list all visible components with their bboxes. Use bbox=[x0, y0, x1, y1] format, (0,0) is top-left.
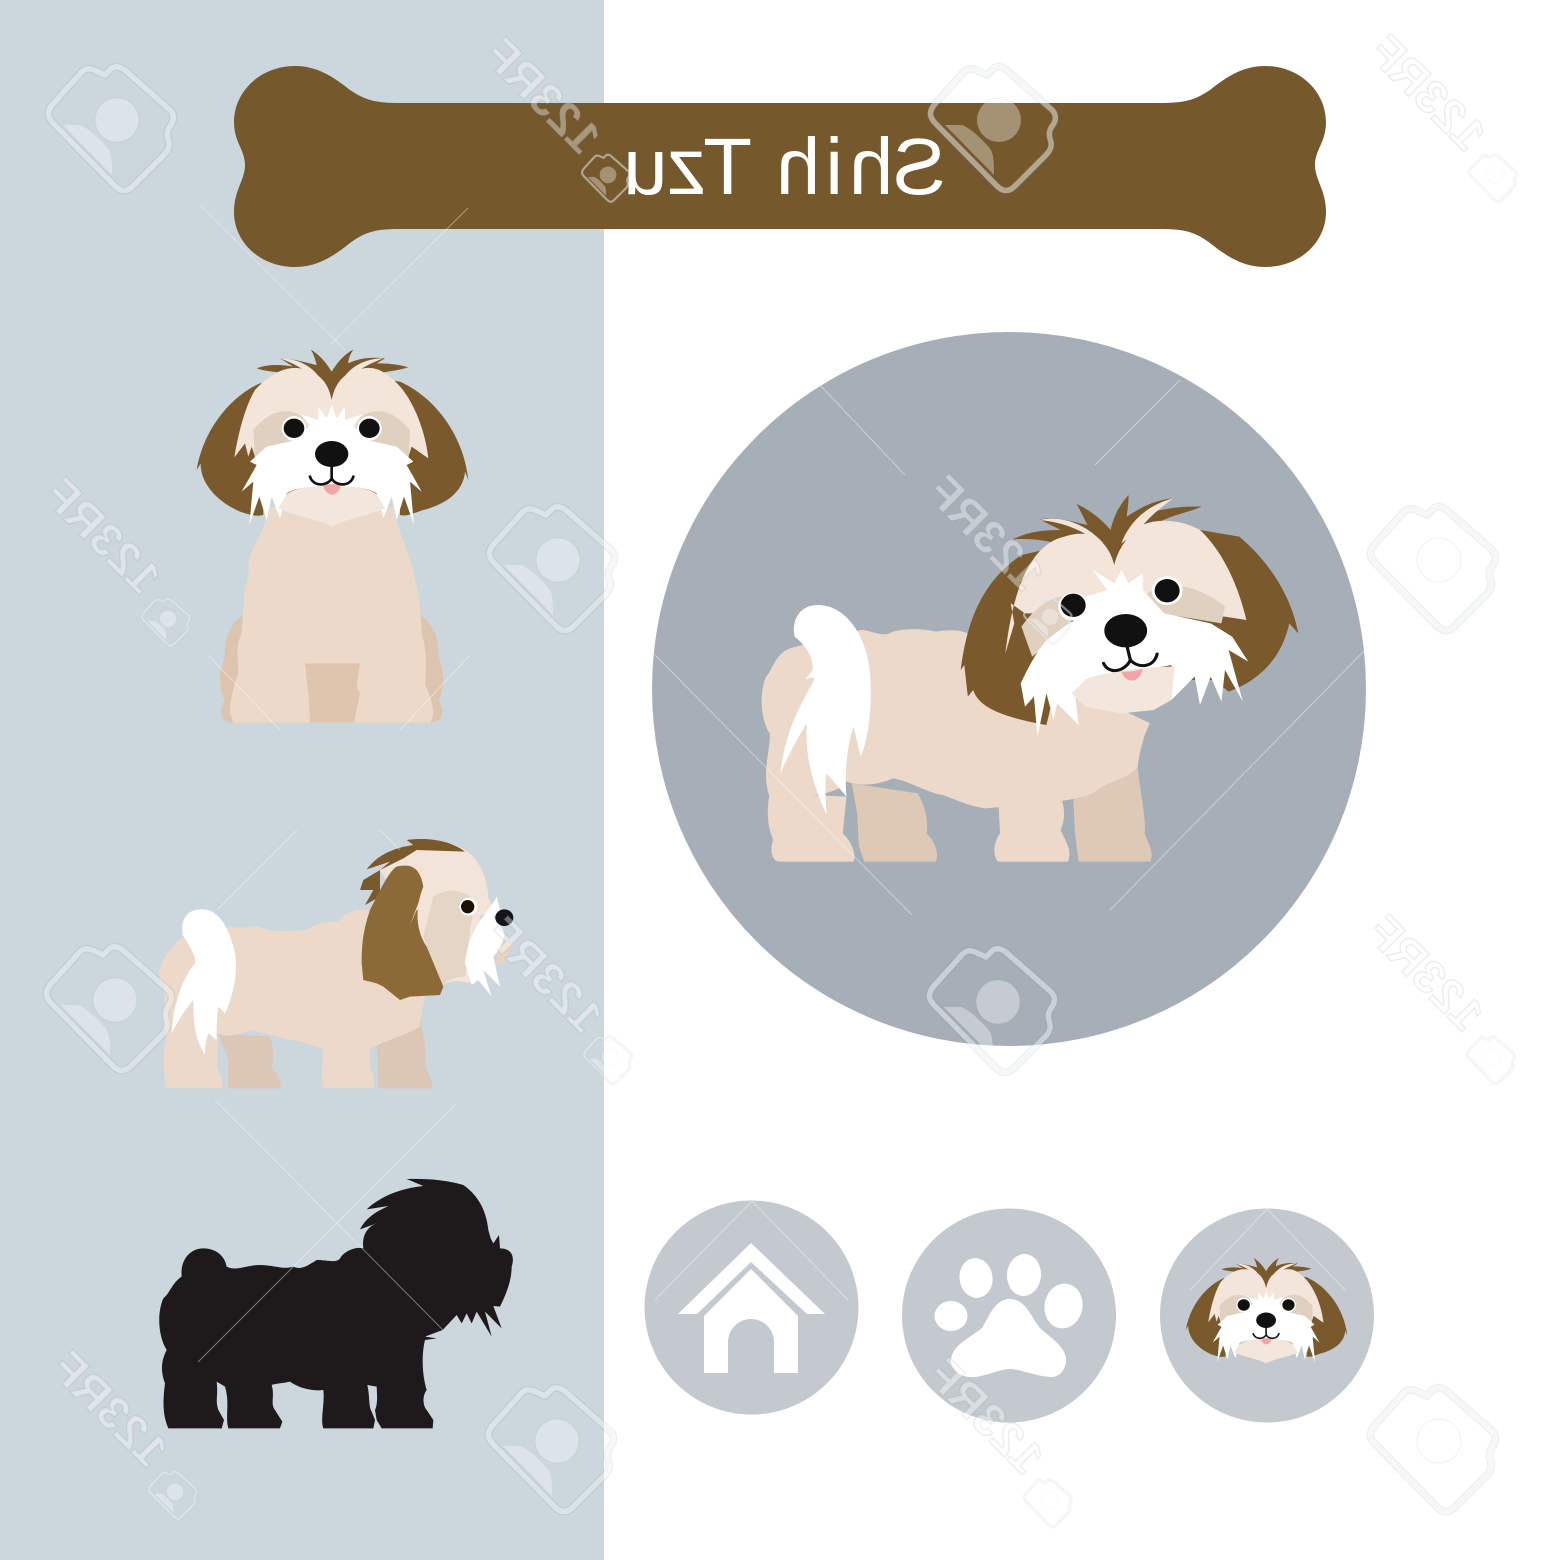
ear bbox=[362, 866, 443, 1000]
title: mirrored Shih Tzu: Shih Tzu bbox=[623, 122, 946, 211]
panel: left blue background bbox=[0, 0, 604, 1560]
head tufts bbox=[360, 839, 465, 905]
tail bbox=[172, 909, 236, 1055]
icon: dog face in circle bbox=[1160, 1208, 1374, 1422]
head bbox=[961, 495, 1298, 737]
body bbox=[159, 910, 443, 1050]
near legs bbox=[164, 1037, 374, 1088]
muzzle bbox=[497, 940, 513, 963]
near legs bbox=[768, 793, 1070, 862]
dog: standing large view bbox=[762, 495, 1298, 862]
icon: dog house bbox=[644, 1200, 858, 1414]
tail bbox=[780, 605, 871, 815]
large grey circle bbox=[652, 332, 1366, 1046]
dog: sitting front view bbox=[197, 349, 468, 723]
body bbox=[230, 507, 433, 723]
bone title banner bbox=[234, 66, 1326, 267]
far legs bbox=[852, 763, 1152, 862]
watermark mirrored text: 123RF bbox=[918, 1348, 1054, 1484]
ear wisp bbox=[410, 890, 427, 925]
watermark thin lines bbox=[198, 205, 1365, 1362]
head bbox=[380, 843, 493, 987]
icon: paw print bbox=[902, 1208, 1116, 1422]
rear legs bbox=[220, 615, 443, 723]
beard bbox=[465, 897, 504, 997]
head bbox=[197, 349, 468, 527]
panel: right white background bbox=[604, 0, 1560, 1560]
watermark mirrored text: 123RF bbox=[477, 907, 613, 1043]
watermark mirrored text: 123RF bbox=[475, 28, 611, 164]
nose bbox=[495, 909, 513, 926]
watermark mirrored text: 123RF bbox=[1358, 905, 1494, 1041]
body bbox=[762, 629, 1150, 808]
dog: black silhouette bbox=[159, 1179, 513, 1428]
gap between forelegs bbox=[305, 663, 360, 723]
far legs bbox=[218, 1017, 432, 1088]
watermark mirrored text: 123RF bbox=[35, 468, 171, 604]
eye bbox=[459, 898, 477, 916]
dog: side profile bbox=[159, 839, 513, 1088]
watermark mirrored text: 123RF bbox=[918, 465, 1054, 601]
watermark mirrored text: 123RF bbox=[1360, 25, 1496, 161]
face patch bbox=[423, 891, 475, 987]
watermark mirrored text: 123RF bbox=[42, 1341, 178, 1477]
